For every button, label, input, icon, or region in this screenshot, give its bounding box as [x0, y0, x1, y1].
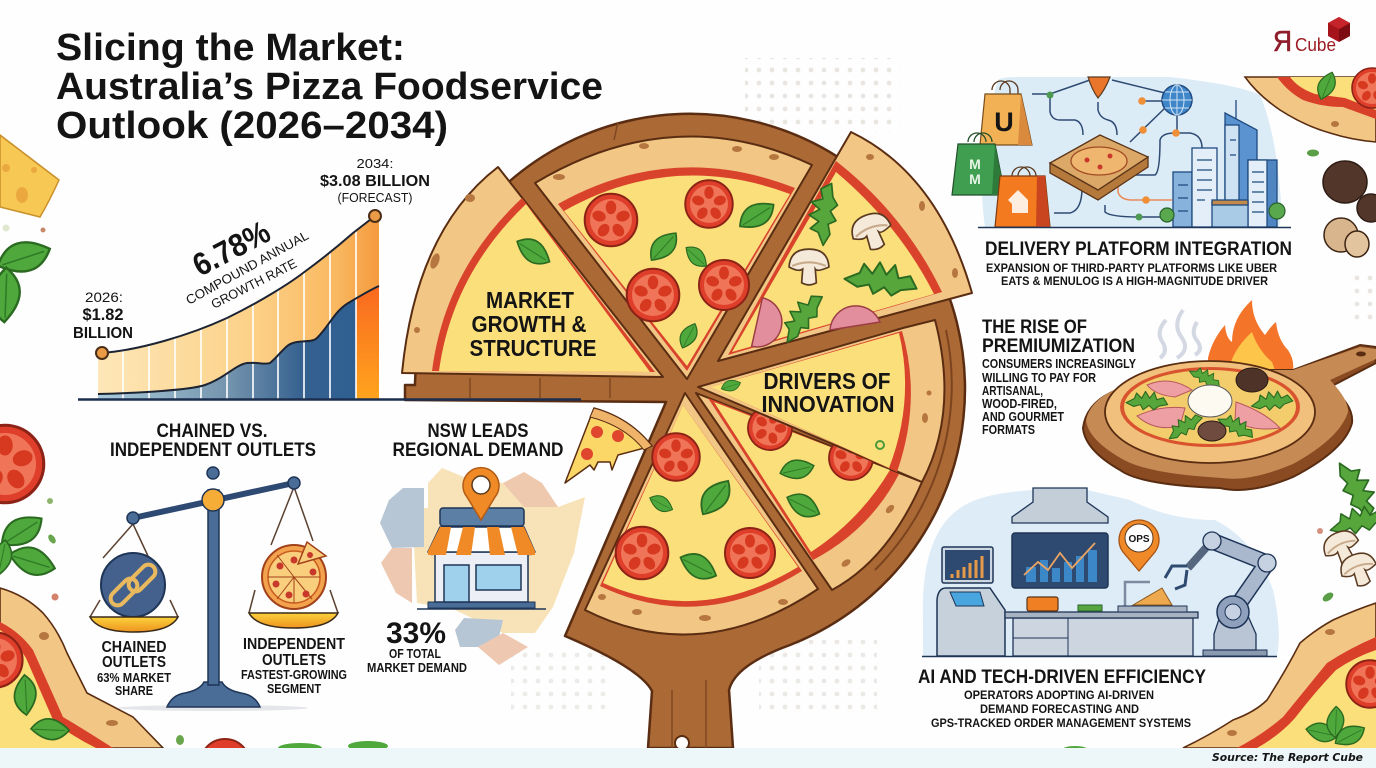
icon: wooden peel: [1083, 345, 1376, 490]
icon: pizza coin: [262, 542, 326, 609]
upper line: [102, 216, 375, 353]
background dot patterns: [745, 58, 900, 133]
text block: WILLING TO PAY FOR: [982, 371, 1096, 385]
icon: robot arm: [1165, 532, 1276, 656]
upper area: [98, 210, 379, 400]
panel: NSW regional demand: [367, 408, 652, 675]
label: independent outlets: SEGMENT: [267, 681, 321, 696]
decorative pizza: bottom left: [0, 588, 163, 748]
slice: bottom: [585, 393, 818, 635]
decorative ingredient: mushrooms right: [1319, 526, 1376, 591]
slice: lower right: [696, 393, 922, 590]
text block: [986, 261, 1277, 288]
icon: chain coin: [101, 553, 165, 617]
decorative ingredient: tomato left: [0, 425, 44, 503]
map of Australia regions: [380, 468, 585, 665]
icon: orange shopping bag: [995, 167, 1050, 227]
icon: trees: [1160, 203, 1285, 222]
slice label: INNOVATION: [762, 391, 894, 417]
label: chained outlets: SHARE: [115, 683, 153, 698]
slice: market growth and structure: [402, 167, 663, 377]
label: chained outlets: [97, 639, 171, 698]
end marker: [369, 210, 381, 222]
chart label: 2026: $1.82: [82, 305, 124, 324]
left pan: [90, 617, 178, 632]
icon: location pin: [463, 468, 499, 520]
chart callout: CAGR: GROWTH RATE: [209, 255, 299, 312]
decorative ingredient: cheese: [0, 135, 59, 217]
heading: [392, 421, 564, 461]
text block: FORMATS: [982, 423, 1035, 437]
callout: 33%: MARKET DEMAND: [367, 660, 467, 675]
text block: GPS-TRACKED ORDER MANAGEMENT SYSTEMS: [931, 716, 1191, 730]
text block: AND GOURMET: [982, 410, 1064, 424]
heading: THE RISE OF: [982, 317, 1087, 338]
callout: 33%: [367, 617, 467, 675]
slice label: GROWTH &: [472, 311, 586, 337]
text block: DEMAND FORECASTING AND: [980, 702, 1139, 716]
heading: [110, 421, 316, 461]
text block: EXPANSION OF THIRD-PARTY PLATFORMS LIKE UBER: [986, 261, 1277, 275]
icon: globe: [1162, 85, 1192, 115]
chart callout: CAGR: COMPOUND ANNUAL: [183, 228, 311, 308]
label: chained outlets: OUTLETS: [102, 654, 166, 671]
callout: 33%: 33%: [386, 617, 446, 650]
decorative ingredient: basil top left: [0, 238, 53, 324]
panel: delivery platform integration: [952, 77, 1292, 288]
icon: M shopping bag: M: [969, 156, 981, 172]
chart label: 2034: (FORECAST): [338, 190, 412, 205]
start marker: [96, 347, 108, 359]
heading: REGIONAL DEMAND: [392, 440, 564, 461]
title: Australia’s Pizza Foodservice: [56, 66, 603, 108]
lower area: [98, 280, 379, 400]
premium pizza: [1105, 361, 1315, 463]
icon: OPS location pin: [1119, 520, 1159, 571]
text block: CONSUMERS INCREASINGLY: [982, 357, 1137, 371]
text block: [982, 357, 1137, 437]
icon: large dashboard screen: [1012, 533, 1108, 588]
label: independent outlets: FASTEST-GROWING: [241, 667, 347, 682]
icon: small monitor: [942, 547, 993, 583]
chart: market growth area chart: [96, 210, 381, 400]
decorative pizza: bottom right: [1183, 603, 1376, 749]
title: Outlook (2026–2034): [56, 105, 448, 147]
icon: terminal: [937, 588, 1005, 656]
label: independent outlets: INDEPENDENT: [243, 636, 345, 653]
decorative ingredient fragments at lower edge: [200, 739, 1087, 768]
title: [56, 27, 603, 147]
icon: pizza slice: [565, 408, 652, 483]
source note: Source: The Report Cube: [1212, 751, 1364, 764]
footer band: [0, 748, 1376, 768]
icon: location pin: [1088, 77, 1110, 98]
heading: AI AND TECH-DRIVEN EFFICIENCY: [918, 667, 1206, 688]
slice label: MARKET: [486, 287, 574, 313]
heading: DELIVERY PLATFORM INTEGRATION: [985, 239, 1292, 260]
column gaps: [123, 230, 356, 399]
logo: RCube: Я: [1273, 26, 1292, 58]
board front edge: [78, 398, 581, 401]
slice: mushroom and salami: [718, 132, 972, 361]
icon: M shopping bag: M: [969, 171, 981, 187]
icon: M shopping bag: [952, 133, 1005, 195]
heading: INDEPENDENT OUTLETS: [110, 440, 316, 461]
illustration background: [923, 490, 1279, 656]
icon: city buildings: [1173, 100, 1277, 227]
heading: PREMIUMIZATION: [982, 336, 1135, 357]
chart label: 2034: [320, 156, 430, 205]
chart label: 2034: 2034:: [356, 156, 394, 171]
label: chained outlets: CHAINED: [102, 639, 166, 656]
slice label: [762, 368, 894, 417]
lower line: [98, 286, 379, 394]
chart callout: CAGR: 6.78%: [187, 213, 276, 283]
wooden board with handle: [405, 114, 965, 748]
logo: RCube: Cube: [1295, 35, 1336, 55]
icon: kitchen counter: [1005, 582, 1198, 656]
icon: store: [417, 508, 546, 609]
title: Slicing the Market:: [56, 27, 405, 69]
network lines: [1032, 80, 1202, 217]
slice: drivers of innovation: [698, 320, 944, 482]
text block: OPERATORS ADOPTING AI-DRIVEN: [964, 688, 1154, 702]
icon: U shopping bag: [980, 81, 1032, 145]
chart label: 2034: $3.08 BILLION: [320, 173, 430, 190]
callout: 33%: OF TOTAL: [389, 646, 441, 661]
decorative ingredient: truffles: [1323, 161, 1376, 257]
right pan: [249, 613, 338, 628]
decorative ingredient: basil left: [0, 510, 59, 582]
slice label: DRIVERS OF: [764, 368, 890, 394]
illustration background: [982, 77, 1281, 227]
slice label: [470, 287, 596, 361]
slice: tomato and basil top: [535, 136, 812, 379]
icon: extractor hood: [1012, 488, 1108, 523]
scattered small ingredients: [2, 150, 1335, 745]
text block: [931, 688, 1191, 730]
text block: ARTISANAL,: [982, 384, 1043, 398]
icon: U shopping bag: U: [994, 107, 1014, 137]
decorative ingredient: arugula right: [1327, 455, 1376, 538]
handle hole: [675, 736, 689, 750]
text block: WOOD-FIRED,: [982, 397, 1057, 411]
label: independent outlets: OUTLETS: [262, 652, 326, 669]
heading: CHAINED VS.: [156, 421, 268, 442]
icon: steam: [1160, 310, 1200, 358]
label: chained outlets: 63% MARKET: [97, 670, 171, 685]
panel: rise of premiumization: [982, 300, 1376, 490]
icon: OPS location pin: OPS: [1128, 534, 1150, 545]
chart label: 2026: BILLION: [73, 325, 133, 342]
heading: [982, 317, 1135, 357]
icon: balance scale: [90, 467, 338, 711]
slice label: STRUCTURE: [470, 335, 596, 361]
chart label: 2026: 2026:: [85, 289, 123, 305]
icon: pizza box: [1050, 135, 1148, 200]
heading: NSW LEADS: [428, 421, 528, 442]
chart label: 2026: [73, 289, 133, 342]
label: independent outlets: [241, 636, 347, 696]
panel: chained vs independent outlets: [90, 421, 347, 711]
panel: AI and tech-driven efficiency: [918, 488, 1279, 730]
icon: flame: [1208, 300, 1293, 375]
text block: EATS & MENULOG IS A HIGH-MAGNITUDE DRIVER: [1001, 274, 1268, 288]
logo: RCube: [1273, 17, 1350, 58]
pizza on wooden board: [78, 114, 972, 750]
decorative pizza: top right: [1245, 68, 1376, 142]
